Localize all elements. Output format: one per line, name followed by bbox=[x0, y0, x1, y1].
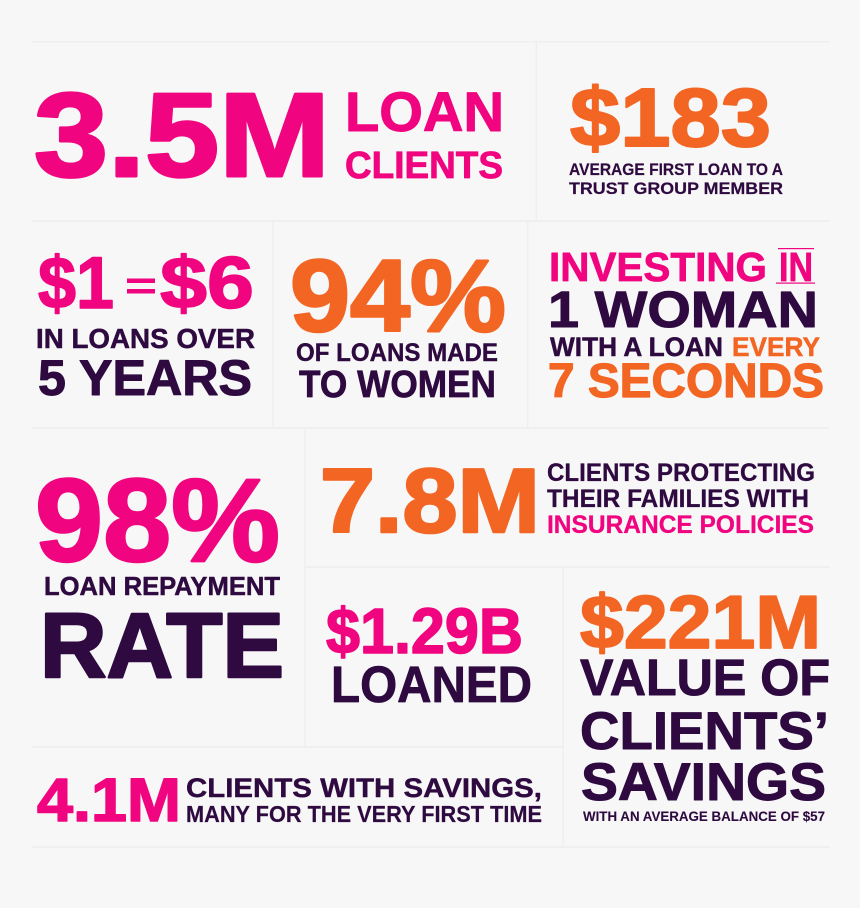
label: clients with savings bbox=[186, 773, 542, 827]
label: of loans made to women: OF LOANS MADE bbox=[296, 339, 498, 367]
label: loan clients: CLIENTS bbox=[345, 145, 503, 187]
panel: 98% repayment rate bbox=[35, 455, 284, 697]
label: clients protecting families: CLIENTS PROTECTING bbox=[547, 459, 815, 487]
text: 7 seconds: 7 SECONDS bbox=[548, 355, 824, 408]
stat: 7.8M: 7.8M bbox=[320, 451, 540, 552]
text: with a loan every: WITH A LOAN bbox=[550, 332, 723, 362]
label: clients with savings: MANY FOR THE VERY FIRST TIME bbox=[186, 801, 542, 827]
label: average first loan bbox=[569, 161, 783, 198]
stat: $183: $183 bbox=[570, 71, 771, 164]
stat: $1 = $6: $6 bbox=[160, 243, 254, 324]
label: clients protecting families: THEIR FAMILIES WITH bbox=[547, 485, 809, 513]
label: of loans made to women bbox=[296, 339, 498, 406]
stat: $1 = $6: $1 bbox=[38, 243, 114, 324]
panel: $221M savings bbox=[580, 580, 830, 824]
panel: investing in 1 woman bbox=[548, 244, 824, 408]
label: loaned: LOANED bbox=[331, 656, 532, 713]
panel: $1 = $6 bbox=[36, 243, 255, 406]
note: average balance: WITH AN AVERAGE BALANCE OF $57 bbox=[583, 809, 825, 824]
label: clients protecting families bbox=[547, 459, 815, 539]
stat: 4.1M: 4.1M bbox=[37, 766, 181, 834]
label: in loans over 5 years: IN LOANS OVER bbox=[36, 323, 255, 354]
stat: 98%: 98% bbox=[35, 455, 280, 587]
text: with a loan every bbox=[550, 332, 820, 362]
text: with a loan every: EVERY bbox=[732, 332, 820, 362]
panel: 7.8M insurance bbox=[320, 451, 815, 552]
label: in loans over 5 years bbox=[36, 323, 255, 406]
label: value of clients' savings: CLIENTS’ bbox=[580, 702, 829, 761]
panel: $1.29B loaned bbox=[326, 595, 532, 713]
label: value of clients' savings: VALUE OF bbox=[580, 649, 830, 706]
panel: 94% of loans bbox=[290, 239, 506, 406]
heading: investing in: IN bbox=[779, 244, 813, 290]
stat: $221M: $221M bbox=[580, 580, 821, 664]
panel: 4.1M savings bbox=[37, 766, 542, 834]
label: average first loan: TRUST GROUP MEMBER bbox=[569, 180, 783, 198]
heading: investing in: INVESTING bbox=[549, 244, 767, 290]
label: loan repayment: LOAN REPAYMENT bbox=[44, 571, 280, 601]
stat: 3.5M: 3.5M bbox=[34, 69, 330, 202]
stat: $1.29B: $1.29B bbox=[326, 595, 523, 667]
label: clients protecting families: INSURANCE POLICIES bbox=[547, 511, 814, 539]
stat: $1 = $6 bbox=[38, 243, 254, 324]
stat: 94%: 94% bbox=[290, 239, 506, 353]
panel: $183 average first loan bbox=[569, 71, 783, 198]
panel: 3.5M loan clients bbox=[34, 69, 504, 202]
label: in loans over 5 years: 5 YEARS bbox=[38, 350, 252, 406]
label: of loans made to women: TO WOMEN bbox=[299, 364, 496, 406]
label: loan clients: LOAN bbox=[345, 80, 504, 143]
label: loan clients bbox=[345, 80, 504, 187]
label: clients with savings: CLIENTS WITH SAVINGS, bbox=[186, 773, 542, 803]
label: rate: RATE bbox=[40, 595, 284, 697]
label: value of clients' savings bbox=[580, 649, 830, 812]
label: average first loan: AVERAGE FIRST LOAN TO A bbox=[569, 161, 783, 179]
text: 1 woman: 1 WOMAN bbox=[548, 281, 818, 338]
label: value of clients' savings: SAVINGS bbox=[581, 753, 826, 812]
